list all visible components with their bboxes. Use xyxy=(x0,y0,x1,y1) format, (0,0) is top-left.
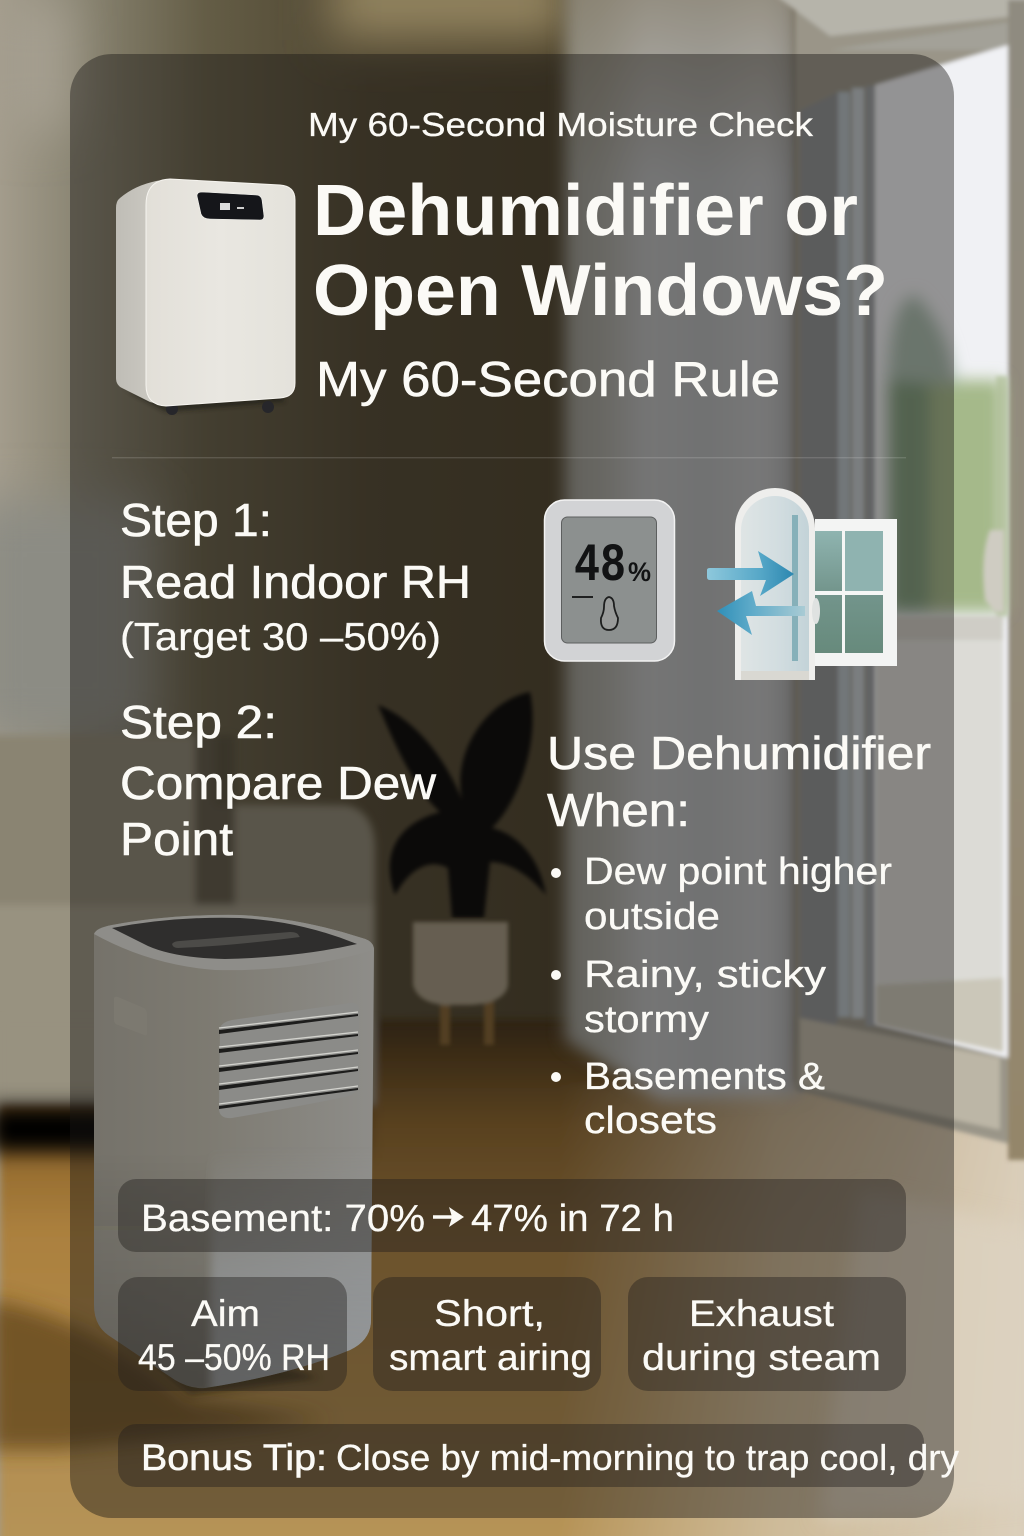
step 2 text: Step 2: xyxy=(120,696,277,748)
pill: bonus tip: Bonus Tip: xyxy=(141,1437,327,1478)
step 2 text: Compare Dew xyxy=(120,757,437,809)
main title: Dehumidifier or xyxy=(313,171,858,251)
step 2 text: Point xyxy=(120,813,233,865)
pill: airing: Short, xyxy=(434,1293,545,1334)
vent grille xyxy=(219,1003,359,1118)
main title xyxy=(313,171,888,331)
garden view through window xyxy=(888,295,1003,612)
wall glow: top strip and left patch xyxy=(330,0,570,40)
pill: exhaust xyxy=(628,1277,906,1391)
bullet list: outside xyxy=(584,896,720,938)
hygrometer icon: % xyxy=(628,557,651,587)
sliding door frame lower xyxy=(800,1018,1000,1130)
main title: Open Windows? xyxy=(313,251,888,331)
pill: exhaust: Exhaust xyxy=(689,1293,835,1334)
hygrometer icon: 48 xyxy=(574,536,626,597)
bullet list xyxy=(551,851,892,1142)
eyebrow title: My 60-Second Moisture Check xyxy=(308,106,814,143)
use dehumidifier heading: When: xyxy=(547,784,690,836)
subtitle: My 60-Second Rule xyxy=(316,353,780,407)
bullet list: Dew point higher xyxy=(584,851,892,893)
use dehumidifier heading xyxy=(547,727,931,836)
window frame and view xyxy=(775,0,1024,1160)
hygrometer icon xyxy=(544,500,674,661)
bullet list: stormy xyxy=(584,999,709,1041)
pill: basement result: Basement: 70% xyxy=(141,1198,425,1240)
door handle xyxy=(983,530,1004,612)
step 1 text: Step 1: xyxy=(120,494,272,546)
step 1 text: (Target 30 –50%) xyxy=(120,616,441,659)
divider under header xyxy=(112,457,906,458)
pill: bonus tip xyxy=(118,1424,959,1487)
step 2 text xyxy=(120,696,437,865)
bullet list: closets xyxy=(584,1100,717,1142)
step 1 text: Read Indoor RH xyxy=(120,556,471,608)
pill: basement result xyxy=(118,1179,906,1252)
airflow arrows xyxy=(707,551,805,635)
pill: aim xyxy=(118,1277,347,1391)
use dehumidifier heading: Use Dehumidifier xyxy=(547,727,931,779)
pill: aim: 45 –50% RH xyxy=(138,1337,330,1378)
open window icon xyxy=(707,488,897,680)
curtain xyxy=(565,0,800,1100)
pot plant xyxy=(378,692,546,1045)
pill: basement result: 47% in 72 h xyxy=(471,1198,674,1240)
pill: aim: Aim xyxy=(191,1293,260,1334)
bullet list: Basements & xyxy=(584,1056,825,1098)
sofa xyxy=(0,735,375,1105)
pill: bonus tip: Close by mid-morning to trap cool, dry xyxy=(336,1437,959,1478)
floor xyxy=(0,1020,1024,1536)
shadow xyxy=(100,1320,320,1395)
portable air conditioner xyxy=(94,914,374,1398)
bullet list: Rainy, sticky xyxy=(584,954,826,996)
white dehumidifier icon xyxy=(116,179,295,415)
pill: airing xyxy=(373,1277,601,1391)
pill: exhaust: during steam xyxy=(642,1337,881,1378)
inner door stiles xyxy=(800,92,838,1095)
step 1 text xyxy=(120,494,471,659)
glass xyxy=(875,45,1008,1058)
pill: airing: smart airing xyxy=(389,1337,592,1378)
